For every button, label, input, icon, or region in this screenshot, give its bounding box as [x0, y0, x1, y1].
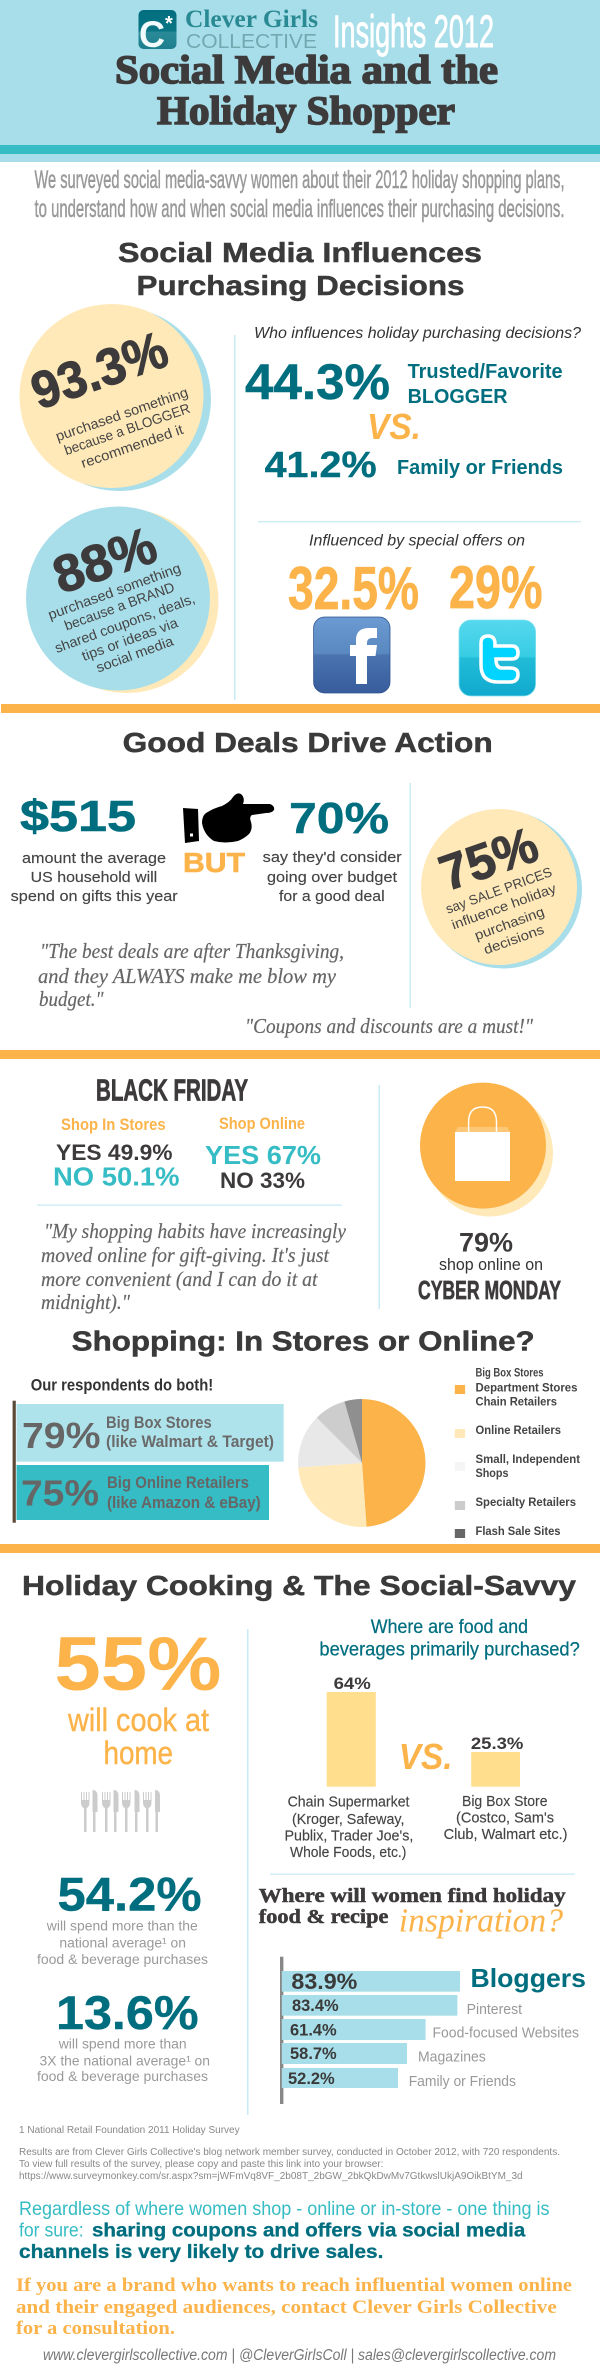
heading: Insights 2012: Insights 2012 [333, 6, 494, 57]
stat: 54.2% [37, 1868, 208, 1967]
bar: Family or Friends: Family or Friends [409, 2073, 516, 2090]
bar: big box store 25.3%: (Costco, Sam's [456, 1809, 554, 1826]
stat: 54.2%: 54.2% [58, 1868, 202, 1921]
call to action: If you are a brand who wants to reach influential women online [16, 2275, 572, 2296]
icon: Twitter [459, 620, 536, 696]
footnote: Results are from Clever Girls Collective's blog network member survey, conducted in October 2012, with 720 respondents. [19, 2147, 560, 2158]
callout: 93.3% blogger circle [20, 304, 211, 491]
legend: Specialty Retailers [476, 1495, 576, 1509]
panel: Black Friday [53, 1073, 321, 1193]
callout: 75% sale prices circle: decisions [482, 922, 546, 957]
callout: 88% brand circle: 88% [46, 516, 164, 606]
quote: shopping habits: midnight)." [41, 1290, 130, 1314]
bar: Food-focused Websites: Food-focused Websites [432, 2025, 579, 2042]
stat: 32.5%: 32.5% [288, 555, 419, 622]
stat: 13.6%: will spend more than [58, 2036, 187, 2052]
label: Trusted/Favorite BLOGGER [408, 361, 563, 408]
stat: Cyber Monday: shop online on [439, 1255, 543, 1274]
icon: Facebook [314, 617, 390, 693]
panel: who influences [245, 325, 581, 485]
bar: 75% online: 75% [21, 1473, 99, 1514]
icon: Clever Girls logo: C [139, 14, 165, 55]
bar: 79% big box: Big Box Stores [106, 1414, 212, 1432]
intro text [34, 166, 564, 223]
bar: Pinterest: Pinterest [467, 2001, 523, 2018]
bar: Pinterest: 83.4% [292, 1997, 339, 2015]
bar: Family or Friends [282, 2068, 516, 2090]
legend: Flash Sale Sites [476, 1524, 561, 1538]
column: shop online [205, 1114, 321, 1193]
column: shop in stores [53, 1115, 180, 1192]
label: BUT: BUT [183, 847, 245, 878]
callout: 93.3% blogger circle: 93.3% [24, 321, 175, 421]
call to action [16, 2275, 572, 2339]
title: Holiday Shopper [157, 88, 455, 133]
stat: 13.6%: 13.6% [56, 1986, 199, 2039]
conclusion text: for sure: [19, 2221, 84, 2242]
bar: Food-focused Websites [282, 2019, 579, 2042]
panel: where purchased [284, 1616, 580, 1861]
quote: best deals: budget." [39, 987, 104, 1011]
logo wordmark: COLLECTIVE [186, 31, 317, 53]
heading: where will women find inspiration [259, 1885, 566, 1940]
legend [455, 1366, 580, 1538]
stat: 70%: say they'd consider [263, 849, 402, 866]
bar: Magazines: 58.7% [290, 2045, 337, 2063]
quote: best deals [38, 939, 344, 1011]
stat: $515 [11, 792, 178, 905]
bar: big box store 25.3% [444, 1734, 568, 1843]
conclusion text: sharing coupons and offers via social media [92, 2221, 526, 2242]
column: shop in stores: Shop In Stores [61, 1115, 166, 1134]
label: Trusted/Favorite BLOGGER: Trusted/Favorite [408, 361, 563, 383]
stat: 44.3%: 44.3% [245, 354, 390, 410]
callout: 88% brand circle [26, 506, 218, 693]
callout: 75% sale prices circle [421, 809, 582, 968]
column: shop online: Shop Online [219, 1114, 305, 1133]
bar: Bloggers: Bloggers [470, 1963, 586, 1993]
icon: pointing hand [183, 793, 274, 843]
heading: Good Deals Drive Action: Good Deals Drive Action [123, 727, 493, 758]
legend: Small, Independent [476, 1452, 580, 1466]
panel: who influences: Who influences holiday purchasing decisions? [254, 325, 581, 342]
callout: 88% brand circle: tips or ideas via [79, 614, 180, 664]
icon: cutlery [81, 1790, 160, 1832]
bar: Family or Friends: 52.2% [288, 2070, 335, 2088]
callout: 93.3% blogger circle: purchased something [53, 384, 190, 444]
bar: big box store 25.3%: Big Box Store [462, 1793, 548, 1810]
column: shop in stores: YES 49.9% [56, 1140, 172, 1165]
contact line: www.clevergirlscollective.com | @CleverGirlsColl | sales@clevergirlscollective.com [43, 2347, 556, 2364]
conclusion text: Regardless of where women shop - online or in-store - one thing is [19, 2199, 550, 2220]
quote: shopping habits: "My shopping habits have increasingly [44, 1219, 347, 1243]
legend: Chain Retailers [476, 1395, 557, 1409]
panel: respondents do both: Our respondents do both! [31, 1377, 213, 1395]
heading: Shopping: In Stores or Online?: Shopping: In Stores or Online? [72, 1326, 535, 1357]
pie chart [298, 1399, 425, 1527]
stat: 70%: 70% [289, 794, 389, 843]
bar: big box store 25.3%: 25.3% [471, 1734, 523, 1753]
footnote: 1 National Retail Foundation 2011 Holiday Survey [19, 2125, 240, 2136]
quote: coupons: "Coupons and discounts are a must!" [245, 1014, 533, 1038]
bar: chain supermarket 64%: Publix, Trader Joe's, [284, 1828, 413, 1845]
bar: 75% online [16, 1465, 269, 1520]
bar: Bloggers: 83.9% [291, 1969, 357, 1994]
stat: $515: $515 [20, 792, 136, 841]
callout: 88% brand circle: because a BRAND [62, 579, 176, 633]
bar: 79% big box: 79% [22, 1415, 100, 1456]
quote: shopping habits: more convenient (and I can do it at [41, 1267, 319, 1291]
stat: 55% will cook: home [104, 1735, 173, 1771]
stat: $515: spend on gifts this year [11, 888, 178, 905]
bar: big box store 25.3%: Club, Walmart etc.) [444, 1826, 568, 1843]
stat: $515: US household will [31, 869, 157, 886]
heading: Social Media Influences Purchasing Decisions: Social Media Influences [118, 237, 482, 268]
column: shop online: YES 67% [205, 1140, 321, 1170]
callout: 88% brand circle: social media [94, 633, 176, 675]
icon: shopping bag circle [420, 1083, 553, 1216]
call to action: and their engaged audiences, contact Clever Girls Collective [16, 2297, 557, 2318]
bar: chain supermarket 64%: Whole Foods, etc.) [290, 1844, 406, 1861]
bar: 79% big box: (like Walmart & Target) [106, 1433, 274, 1451]
bar: chain supermarket 64% [284, 1674, 413, 1861]
callout: 93.3% blogger circle: recommended it [79, 421, 185, 471]
stat: 29%: 29% [449, 554, 542, 621]
bar chart: inspiration sources [280, 1957, 586, 2104]
stat: 55% will cook: will cook at [67, 1702, 209, 1738]
stat: 55% will cook: 55% [54, 1622, 221, 1707]
quote: shopping habits [41, 1219, 347, 1314]
legend: Online Retailers [476, 1423, 561, 1437]
callout: 88% brand circle: purchased something [46, 560, 183, 623]
callout: 75% sale prices circle: say SALE PRICES [444, 864, 554, 917]
footnote: To view full results of the survey, please copy and paste this link into your browser: [19, 2159, 383, 2170]
call to action: for a consultation. [16, 2318, 175, 2339]
stat: 54.2%: national average¹ on [59, 1935, 186, 1951]
heading: Social Media Influences Purchasing Decisions: Purchasing Decisions [136, 270, 464, 301]
footnote [19, 2125, 560, 2182]
quote: best deals: and they ALWAYS make me blow my [38, 964, 337, 988]
stat: 70%: for a good deal [279, 888, 385, 905]
bar: Pinterest [282, 1995, 523, 2018]
panel: where purchased: Where are food and [371, 1616, 528, 1638]
bar: Magazines: Magazines [418, 2049, 486, 2066]
callout: 88% brand circle: shared coupons, deals, [52, 590, 197, 656]
legend: Department Stores [476, 1381, 578, 1395]
bar: 75% online: (like Amazon & eBay) [107, 1494, 261, 1512]
stat: Cyber Monday [418, 1228, 561, 1305]
callout: 75% sale prices circle: purchasing [473, 904, 546, 943]
icon: Clever Girls logo: * [165, 13, 173, 35]
stat: 54.2%: will spend more than the [46, 1918, 198, 1934]
callout: 75% sale prices circle: influence holiday [450, 881, 558, 932]
bar: chain supermarket 64%: 64% [334, 1674, 371, 1693]
legend: Big Box Stores [476, 1366, 544, 1380]
bar: Food-focused Websites: 61.4% [290, 2022, 337, 2040]
column: shop in stores: NO 50.1% [53, 1162, 180, 1192]
heading: where will women find inspiration: inspiration? [399, 1903, 563, 1940]
icon: Clever Girls logo [138, 10, 176, 55]
heading: where will women find inspiration: Where will women find holiday [259, 1885, 566, 1907]
heading: Social Media Influences Purchasing Decisions [118, 237, 482, 301]
label: Family or Friends: Family or Friends [397, 457, 563, 479]
panel: special offers: Influenced by special offers on [309, 533, 525, 550]
bar: Bloggers [282, 1963, 586, 1994]
conclusion text [19, 2199, 550, 2263]
stat: 13.6%: 3X the national average¹ on [40, 2053, 210, 2069]
stat: 13.6% [37, 1986, 210, 2084]
callout: 93.3% blogger circle: because a BLOGGER [62, 400, 192, 458]
conclusion text: channels is very likely to drive sales. [19, 2242, 383, 2263]
logo wordmark [185, 6, 318, 53]
label: VS.: VS. [399, 1736, 452, 1777]
stat: 13.6%: food & beverage purchases [37, 2068, 208, 2084]
bar: chain supermarket 64%: (Kroger, Safeway, [292, 1811, 404, 1828]
stat: 55% will cook [54, 1622, 221, 1771]
logo wordmark: Clever Girls [185, 6, 318, 33]
bar: 79% big box [16, 1404, 284, 1462]
panel: respondents do both [13, 1377, 284, 1523]
panel: header [0, 0, 600, 162]
stat: 41.2%: 41.2% [265, 444, 377, 485]
stat: 70%: going over budget [267, 869, 398, 886]
footnote: https://www.surveymonkey.com/sr.aspx?sm=jWFmVq8VF_2b08T_2bGW_2bkQkDwMv7GtkwslUkjA9OikBtYM_3d [19, 2171, 523, 2182]
bar: chain supermarket 64%: Chain Supermarket [288, 1794, 410, 1811]
title [115, 47, 498, 133]
title: Social Media and the [115, 47, 498, 92]
callout: 75% sale prices circle: 75% [432, 816, 545, 902]
quote: best deals: "The best deals are after Thanksgiving, [40, 939, 344, 963]
heading: where will women find inspiration: food & recipe [259, 1906, 389, 1928]
panel: special offers [288, 533, 542, 696]
bar: Magazines [282, 2043, 486, 2066]
heading: Holiday Cooking: Holiday Cooking & The Social-Savvy [22, 1570, 576, 1601]
stat: Cyber Monday: 79% [459, 1228, 513, 1258]
label: VS.: VS. [367, 406, 421, 447]
label: Trusted/Favorite BLOGGER: BLOGGER [408, 386, 508, 408]
stat: 70% [263, 794, 402, 905]
quote: shopping habits: moved online for gift-giving. It's just [41, 1243, 330, 1267]
bar: 75% online: Big Online Retailers [107, 1474, 249, 1492]
panel: Black Friday: BLACK FRIDAY [96, 1073, 248, 1108]
column: shop online: NO 33% [220, 1168, 305, 1193]
stat: 54.2%: food & beverage purchases [37, 1951, 208, 1967]
stat: $515: amount the average [22, 850, 166, 867]
panel: where purchased: beverages primarily purchased? [319, 1639, 580, 1661]
legend: Shops [476, 1466, 509, 1480]
